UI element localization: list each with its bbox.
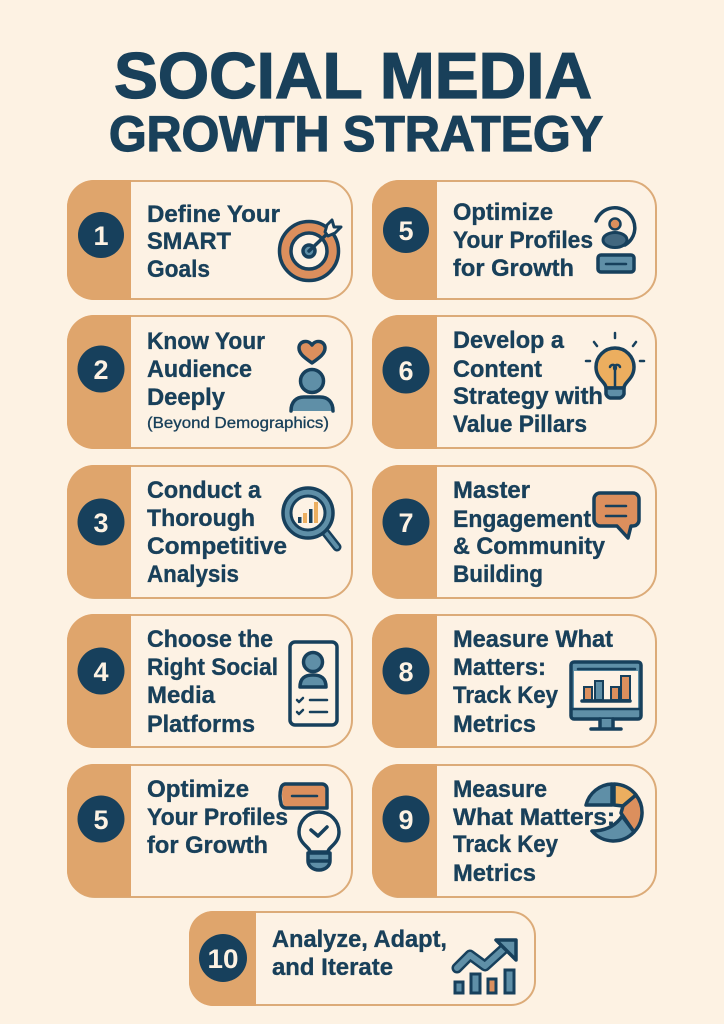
step 1 text: [147, 201, 280, 283]
icon: person with heart: [291, 341, 333, 411]
icon: target with arrow: [280, 220, 341, 280]
step number 2: [78, 346, 124, 392]
step 7 text: Engagement: [453, 506, 591, 533]
step 8 text: [453, 626, 613, 738]
icon: monitor with bar chart: [571, 662, 641, 729]
step number 5 left: 5: [93, 805, 109, 835]
step 5 right text: Your Profiles: [453, 227, 593, 254]
icon: profile card with checklist: [290, 642, 337, 725]
step 10 text: and Iterate: [272, 954, 393, 981]
step 8 text: Measure What: [453, 626, 613, 653]
icon: profile ring and bar: [596, 208, 635, 272]
step 7 text: Building: [453, 561, 543, 588]
step 9 text: Track Key: [453, 831, 559, 858]
step 4 text: Right Social: [147, 654, 278, 681]
panel: step 2 know your audience: [67, 315, 352, 449]
panel: step 3 competitive analysis: [67, 465, 352, 598]
step number 3: 3: [93, 508, 109, 538]
step number 1: [78, 212, 124, 258]
step 2 text: (Beyond Demographics): [147, 415, 329, 432]
step 9 text: What Matters:: [453, 804, 615, 831]
step number 6: [382, 346, 430, 394]
step 3 text: Competitive: [147, 533, 287, 560]
step number 4: 4: [93, 657, 109, 687]
step number 7: [382, 498, 430, 546]
step 7 text: [453, 477, 606, 588]
step 5 right text: Optimize: [453, 199, 553, 226]
step 5 left text: [147, 776, 288, 859]
step number 3: [78, 498, 124, 546]
step 3 text: Thorough: [147, 505, 255, 532]
step 8 text: Matters:: [453, 654, 546, 681]
step number 10: [199, 934, 247, 982]
step 10 text: Analyze, Adapt,: [272, 926, 447, 953]
panel: step 7 engagement and community: [372, 465, 656, 598]
step 8 text: Track Key: [453, 682, 559, 709]
panel: step 5 optimize profiles (left): [67, 764, 352, 897]
icon: speech bar and light bulb with check: [280, 784, 339, 870]
step number 5 left: [78, 796, 124, 842]
step number 9: 9: [398, 805, 414, 835]
step number 5 right: [383, 207, 429, 253]
step number 6: 6: [398, 356, 414, 386]
step 3 text: Conduct a: [147, 477, 262, 504]
step 4 text: Platforms: [147, 711, 255, 738]
step 6 text: Value Pillars: [453, 411, 587, 438]
step number 2: 2: [93, 355, 109, 385]
step 3 text: Analysis: [147, 561, 239, 588]
icon: pie chart: [586, 784, 642, 841]
panel: step 10 analyze adapt iterate: [189, 911, 535, 1006]
step number 8: 8: [398, 657, 414, 687]
step number 5 right: 5: [398, 216, 414, 246]
step 7 text: & Community: [453, 533, 606, 560]
title: GROWTH STRATEGY: [109, 106, 603, 162]
step 1 text: Goals: [147, 256, 210, 283]
step number 1: 1: [93, 221, 109, 251]
panel: step 5 optimize profiles (right): [372, 180, 656, 300]
title: SOCIAL MEDIA: [114, 39, 592, 112]
step 2 text: Audience: [147, 356, 252, 383]
panel: step 6 content strategy: [372, 315, 656, 449]
step 8 text: Metrics: [453, 711, 536, 738]
icon: speech bubble: [594, 493, 639, 538]
step 10 text: [272, 926, 447, 981]
step number 8: [382, 648, 430, 694]
step 9 text: [453, 776, 615, 887]
step 5 right text: for Growth: [453, 255, 574, 282]
step 5 left text: Optimize: [147, 776, 249, 803]
step number 7: 7: [398, 508, 414, 538]
step 4 text: Media: [147, 682, 216, 709]
step 5 right text: [453, 199, 593, 282]
step 4 text: [147, 626, 278, 738]
icon: growth arrow with bars: [455, 940, 516, 993]
icon: magnifying glass with bars: [283, 488, 337, 547]
step 5 left text: for Growth: [147, 832, 268, 859]
step 5 left text: Your Profiles: [147, 804, 288, 831]
step 6 text: Develop a: [453, 327, 565, 354]
step 6 text: [453, 327, 603, 438]
step 9 text: Measure: [453, 776, 547, 803]
step 4 text: Choose the: [147, 626, 273, 653]
step 6 text: Strategy with: [453, 383, 603, 410]
step 2 text: Deeply: [147, 384, 226, 411]
step 3 text: [147, 477, 287, 588]
panel: step 4 choose platforms: [67, 614, 352, 748]
step 7 text: Master: [453, 477, 530, 504]
step 6 text: Content: [453, 356, 542, 383]
step 1 text: SMART: [147, 228, 231, 255]
step 9 text: Metrics: [453, 860, 536, 887]
panel: step 9 track key metrics: [372, 764, 656, 897]
step 1 text: Define Your: [147, 201, 280, 228]
panel: step 8 measure what matters: [372, 614, 656, 748]
step 2 text: Know Your: [147, 328, 265, 355]
step number 9: [382, 796, 430, 842]
step number 4: [78, 648, 124, 694]
step 2 text: [147, 328, 329, 432]
icon: light bulb: [586, 333, 644, 398]
step number 10: 10: [208, 944, 238, 974]
panel: step 1 define SMART goals: [67, 180, 352, 300]
title: [109, 39, 603, 162]
